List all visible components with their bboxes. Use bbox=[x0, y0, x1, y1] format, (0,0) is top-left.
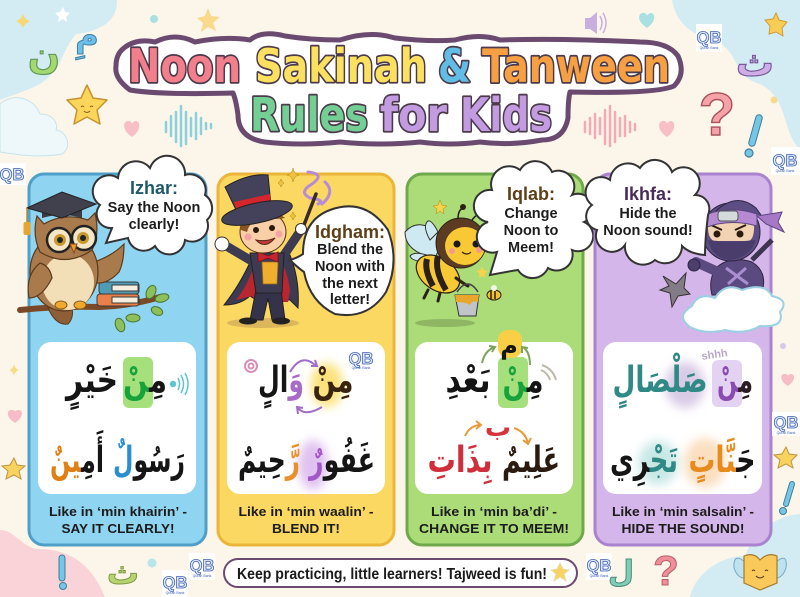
wand bbox=[302, 194, 316, 230]
title line 1: Tanween bbox=[482, 39, 670, 93]
side decorations left bbox=[2, 364, 25, 479]
icon: smiling star bbox=[67, 85, 107, 124]
wing left bbox=[28, 263, 52, 298]
bubble heading: Iqlab: bbox=[507, 184, 555, 204]
watermark bbox=[772, 412, 800, 436]
icon: heart right bbox=[659, 121, 674, 137]
title line 2 bbox=[250, 88, 552, 142]
panel: Ikhfa bbox=[586, 160, 784, 545]
wings bbox=[405, 225, 444, 258]
branch bbox=[20, 297, 160, 310]
watermark bbox=[189, 553, 215, 580]
fist bbox=[696, 262, 718, 272]
star bbox=[433, 200, 447, 214]
icon: sound waves bbox=[170, 373, 188, 395]
footer text: Keep practicing, little learners! Tajweed is fun! bbox=[237, 566, 547, 583]
watermark bbox=[771, 147, 800, 175]
watermark bbox=[162, 570, 188, 597]
title bbox=[116, 34, 681, 144]
arrows: blend bbox=[290, 360, 322, 414]
arabic: min badi: بَعْدِ bbox=[446, 360, 490, 401]
white card: Ikhfa examples bbox=[603, 342, 762, 494]
panel: Izhar bbox=[20, 156, 212, 545]
shadow bbox=[415, 319, 475, 327]
ground shadow bbox=[227, 318, 299, 328]
title line 2: Kids bbox=[460, 88, 552, 142]
arabic: ghafurun rahim bbox=[238, 437, 375, 481]
title line 1: & bbox=[438, 39, 471, 93]
arabic: min badi bbox=[446, 360, 544, 401]
watermark: Quran Bank bbox=[777, 431, 796, 435]
highlights bbox=[298, 363, 343, 490]
dot bbox=[770, 96, 778, 104]
antennae bbox=[458, 208, 485, 220]
panel background bbox=[407, 174, 583, 545]
star bbox=[476, 266, 488, 278]
icon: letter tha green: ث bbox=[107, 555, 139, 591]
head bbox=[35, 213, 97, 260]
feet bbox=[55, 301, 86, 309]
icon: speaker bbox=[585, 12, 606, 34]
arabic: jannatin tajri bbox=[610, 436, 756, 487]
arabic: rasulun amin: أَمِينٌ bbox=[50, 429, 104, 481]
title line 1 bbox=[128, 39, 670, 93]
icon: letter meem blue: مِ bbox=[75, 17, 99, 60]
caption: CHANGE IT TO MEEM! bbox=[419, 521, 569, 536]
arabic: alim bidhati bbox=[428, 440, 560, 484]
caption: Like in ‘min waalin’ - bbox=[238, 504, 374, 519]
arabic: ghafurun rahim: غَفُورٌ bbox=[308, 437, 375, 481]
icon: sparkle bbox=[16, 14, 30, 28]
dot bbox=[150, 15, 158, 23]
bow tie bbox=[258, 252, 278, 262]
bubble text: Blend the bbox=[317, 242, 383, 258]
highlight: noon bbox=[498, 357, 528, 408]
speech bubble: Iqlab: Noon to bbox=[504, 223, 559, 239]
tail bbox=[48, 308, 72, 324]
title line 1: Sakinah bbox=[255, 39, 427, 93]
graduation cap bbox=[24, 192, 96, 235]
watermark: QB bbox=[774, 414, 798, 432]
white card: Idgham examples bbox=[227, 342, 385, 494]
watermark: Quran Bank bbox=[193, 574, 212, 578]
watermark: QB bbox=[587, 557, 611, 575]
title line 1: Noon bbox=[128, 39, 241, 93]
watermark: Quran Bank bbox=[352, 366, 371, 370]
panel background bbox=[595, 174, 771, 545]
headband tails bbox=[757, 212, 784, 232]
speech bubble: Izhar: clearly! bbox=[129, 217, 179, 233]
belly bbox=[42, 254, 94, 310]
illustration: bee bbox=[405, 200, 501, 327]
icon: teal heart bbox=[639, 13, 654, 28]
arabic: min salsalin bbox=[612, 352, 753, 409]
mini bee bbox=[487, 285, 501, 300]
arabic: rasulun amin: رَسُولٌ bbox=[113, 438, 185, 481]
caption bbox=[419, 504, 569, 536]
face bbox=[240, 211, 286, 253]
speech bubble: Ikhfa bbox=[586, 160, 709, 265]
caption bbox=[612, 504, 754, 536]
title sticker backing bbox=[116, 34, 681, 144]
icon: exclamation bottom bbox=[60, 558, 66, 590]
arrows: change bbox=[482, 346, 530, 365]
icon: letter lam teal: ل bbox=[608, 556, 634, 589]
title line 2: for bbox=[380, 88, 447, 142]
arabic: ghafurun rahim: رَّحِيمٌ bbox=[238, 440, 300, 481]
magic swirl bbox=[304, 172, 330, 204]
watermark: Quran Bank bbox=[166, 591, 185, 595]
sparkles bbox=[278, 168, 299, 220]
icon: star top right bbox=[765, 13, 787, 36]
cloud bbox=[683, 287, 784, 332]
panel background bbox=[218, 174, 394, 545]
arabic: min salsalin: صَلْصَالٍ bbox=[612, 352, 708, 409]
white card: Izhar examples bbox=[38, 342, 196, 494]
bubble heading: Idgham: bbox=[315, 222, 385, 242]
sword bbox=[752, 240, 772, 260]
watermark: QB bbox=[0, 166, 24, 184]
dot bbox=[148, 558, 156, 568]
icon: heart left bbox=[124, 121, 139, 137]
watermark: Quran Bank bbox=[776, 169, 795, 173]
bubble text: Say the Noon bbox=[108, 200, 200, 216]
watermark: QB bbox=[773, 152, 797, 170]
icon: white star bbox=[55, 7, 70, 22]
bubble text: Change bbox=[504, 206, 558, 222]
panel background bbox=[29, 174, 206, 545]
icon: star bbox=[551, 563, 569, 581]
arrows: change orange bbox=[465, 421, 531, 444]
caption: Like in ‘min khairin’ - bbox=[49, 504, 187, 519]
side decorations right bbox=[774, 343, 797, 514]
arabic: jannatin tajri: جَنَّاتٍ bbox=[688, 436, 756, 484]
books bbox=[97, 282, 139, 306]
bubble heading: Izhar: bbox=[130, 178, 178, 198]
icon: exclamation bbox=[745, 118, 759, 157]
speech bubble: Idgham: Noon with bbox=[315, 259, 385, 275]
arabic: alim bidhati: عَلِيمٌ bbox=[502, 440, 560, 481]
stripes bbox=[426, 256, 446, 290]
watermark: QB bbox=[697, 29, 721, 47]
footer banner bbox=[224, 559, 577, 587]
highlight: meem bbox=[498, 330, 522, 358]
illustration: owl on branch bbox=[20, 192, 170, 333]
caption: Like in ‘min salsalin’ - bbox=[612, 504, 754, 519]
arabic: min waalin: وَالٍ bbox=[258, 360, 304, 409]
gloves bbox=[215, 237, 229, 251]
highlight: noon bbox=[123, 357, 153, 408]
face bbox=[708, 222, 754, 241]
letter ba above: ب bbox=[485, 412, 511, 442]
highlights bbox=[638, 362, 726, 488]
cloud top left bbox=[0, 98, 68, 156]
icon: swirl decor bbox=[245, 360, 257, 372]
arabic: min waalin bbox=[258, 360, 354, 409]
mask bbox=[708, 240, 756, 260]
icon: sound wave pink bbox=[585, 106, 635, 146]
title line 2: Rules bbox=[250, 88, 368, 142]
icon: sound wave blue bbox=[166, 106, 211, 146]
leaves bbox=[113, 284, 170, 333]
panel: Iqlab bbox=[405, 161, 593, 545]
eyes and smile bbox=[253, 227, 259, 233]
shuriken bbox=[660, 273, 690, 307]
caption: SAY IT CLEARLY! bbox=[62, 521, 174, 536]
icon: letter noon green: ن bbox=[28, 35, 60, 77]
speech bubble: Idgham: letter! bbox=[330, 292, 370, 308]
arabic: min khairin: خَيْرٍ bbox=[64, 360, 118, 411]
arabic: min badi: مِنْ bbox=[503, 360, 544, 401]
head bbox=[436, 218, 486, 268]
icon: question mark: ? bbox=[699, 81, 735, 148]
watermark: QB bbox=[190, 557, 214, 575]
caption: Like in ‘min ba’di’ - bbox=[431, 504, 557, 519]
watermark bbox=[586, 553, 612, 580]
headband bbox=[704, 210, 757, 228]
speech bubble: Idgham: the next bbox=[322, 276, 378, 292]
wing right bbox=[94, 244, 124, 283]
legs bbox=[424, 278, 468, 301]
illustration: magician bbox=[215, 168, 330, 328]
shhh label: shhh bbox=[701, 347, 729, 363]
caption: HIDE THE SOUND! bbox=[622, 521, 744, 536]
body bbox=[711, 260, 764, 295]
arabic: rasulun amin bbox=[50, 429, 185, 481]
arabic: alim bidhati: بِذَاتِ bbox=[428, 440, 492, 484]
icon: letter tha purple: ث bbox=[736, 43, 774, 85]
glasses bbox=[47, 226, 96, 252]
sash bbox=[726, 268, 748, 284]
legs bbox=[250, 290, 285, 320]
jacket bbox=[250, 253, 284, 293]
watermark: QB bbox=[163, 574, 187, 592]
head hood bbox=[702, 203, 760, 261]
watermark bbox=[696, 24, 722, 52]
eyes bbox=[714, 230, 720, 238]
vest bbox=[262, 262, 278, 284]
bubble heading: Ikhfa: bbox=[624, 184, 672, 204]
top hat bbox=[220, 175, 294, 230]
icon: book with wings bbox=[734, 555, 786, 590]
hair bbox=[240, 210, 285, 232]
panel: Idgham bbox=[215, 168, 394, 545]
speech bubble: Izhar bbox=[93, 156, 212, 254]
icon: grey waves bbox=[541, 365, 556, 380]
body bbox=[30, 233, 98, 311]
caption bbox=[49, 504, 187, 536]
bubble text: Hide the bbox=[619, 206, 677, 222]
arabic: min waalin: مِنْ bbox=[312, 360, 354, 401]
watermark: Quran Bank bbox=[590, 574, 609, 578]
arms bbox=[228, 230, 301, 260]
icon: question mark bottom: ? bbox=[653, 547, 679, 594]
caption: BLEND IT! bbox=[272, 521, 340, 536]
white card: Iqlab examples bbox=[415, 342, 573, 494]
body bbox=[409, 247, 467, 301]
speech bubble: Idgham bbox=[290, 206, 394, 315]
arabic: min khairin bbox=[64, 360, 167, 411]
arabic: min salsalin: مِنْ bbox=[717, 360, 753, 401]
speech bubble: Iqlab bbox=[474, 161, 593, 278]
speech bubble: Ikhfa: Noon sound! bbox=[603, 223, 693, 239]
watermark: QB bbox=[349, 350, 373, 368]
arabic: min khairin: مِنْ bbox=[123, 360, 167, 401]
bucket bbox=[455, 284, 479, 316]
icon: star top bbox=[197, 8, 220, 32]
highlight: noon bbox=[712, 360, 742, 407]
cape bbox=[224, 255, 298, 308]
letter meem above: م bbox=[500, 333, 518, 360]
arabic: jannatin tajri: تَجْرِي bbox=[610, 440, 678, 487]
caption bbox=[238, 504, 374, 536]
watermark: Quran Bank bbox=[700, 46, 719, 50]
illustration: ninja bbox=[660, 200, 784, 332]
speech bubble: Iqlab: Meem! bbox=[508, 240, 554, 256]
